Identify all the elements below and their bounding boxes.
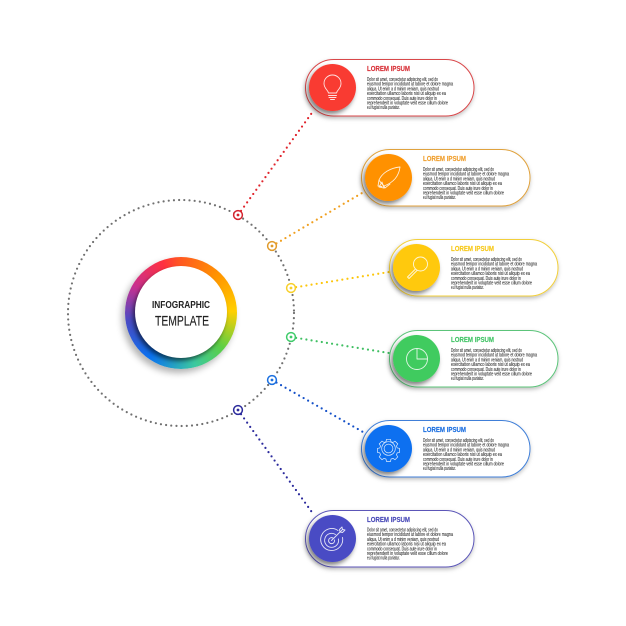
heading: LOREM IPSUM	[367, 515, 410, 524]
body text: eu fugiat nulla pariatur.	[423, 466, 456, 472]
body text: aliqua. Ut enim a d minim veniam, quis nostrud	[367, 537, 439, 543]
icon: magnifier	[408, 257, 428, 278]
panel: yellow magnifier item	[390, 240, 558, 296]
body text: Dolor sit amet, consectetur adipiscing elit, sed do	[451, 348, 522, 354]
icon: target	[321, 527, 345, 551]
panel: green pie chart item	[390, 330, 558, 387]
body text: eiusmod tempor incididunt ut labore et dolore magna	[451, 262, 537, 268]
body text: eu fugiat nulla pariatur.	[451, 285, 484, 291]
body text: exercitation ullamco laboris nisi ut aliquip ex ea	[367, 542, 446, 548]
body text: aliqua. Ut enim a d minim veniam, quis nostrud	[423, 447, 495, 453]
node: blue	[268, 376, 276, 384]
icon: gear	[377, 439, 400, 462]
title text	[152, 299, 210, 328]
body text: commodo consequat. Duis aute irure dolor in	[367, 546, 437, 552]
connector: blue	[272, 380, 363, 432]
body text	[423, 438, 509, 472]
body text: eiusmod tempor incididunt ut labore et dolore magna	[367, 82, 453, 88]
body text: commodo consequat. Duis aute irure dolor in	[423, 186, 493, 192]
connector: red	[238, 110, 314, 215]
body text: eiusmod tempor incididunt ut labore et dolore magna	[423, 172, 509, 178]
panel: red bulb item	[306, 60, 474, 116]
dotted orbit circle	[68, 200, 294, 426]
connector: orange	[272, 193, 362, 246]
icon: rocket	[378, 167, 400, 188]
body text: eu fugiat nulla pariatur.	[423, 195, 456, 201]
body text: reprehenderit in voluptate velit esse cillum dolore	[367, 551, 448, 557]
body text: reprehenderit in voluptate velit esse cillum dolore	[451, 280, 532, 286]
body text: Dolor sit amet, consectetur adipiscing elit, sed do	[367, 528, 438, 534]
node: red	[234, 211, 242, 219]
body text: eiusmod tempor incididunt ut labore et dolore magna	[367, 532, 453, 538]
icon: pie chart	[406, 348, 428, 370]
body text: commodo consequat. Duis aute irure dolor in	[451, 276, 521, 282]
heading: LOREM IPSUM	[367, 64, 410, 73]
title text: TEMPLATE	[155, 312, 209, 328]
heading: LOREM IPSUM	[423, 425, 466, 434]
body text: aliqua. Ut enim a d minim veniam, quis nostrud	[451, 357, 523, 363]
body text: eiusmod tempor incididunt ut labore et dolore magna	[451, 353, 537, 359]
body text: Dolor sit amet, consectetur adipiscing elit, sed do	[423, 167, 494, 173]
connector: green	[291, 337, 389, 353]
panel: purple target item	[306, 510, 474, 567]
body text: reprehenderit in voluptate velit esse cillum dolore	[423, 462, 504, 468]
body text	[423, 167, 509, 201]
panel: orange rocket item	[362, 150, 530, 206]
body text: eu fugiat nulla pariatur.	[451, 376, 484, 382]
heading: LOREM IPSUM	[451, 244, 494, 253]
body text: Dolor sit amet, consectetur adipiscing elit, sed do	[451, 257, 522, 263]
body text	[367, 528, 453, 562]
body text: reprehenderit in voluptate velit esse cillum dolore	[423, 190, 504, 196]
body text: eiusmod tempor incididunt ut labore et dolore magna	[423, 443, 509, 449]
heading: LOREM IPSUM	[451, 335, 494, 344]
body text: exercitation ullamco laboris nisi ut aliquip ex ea	[451, 271, 530, 277]
body text: reprehenderit in voluptate velit esse cillum dolore	[451, 372, 532, 378]
body text: eu fugiat nulla pariatur.	[367, 105, 400, 111]
inner white disc	[135, 266, 227, 358]
body text: exercitation ullamco laboris nisi ut aliquip ex ea	[451, 362, 530, 368]
body text: aliqua. Ut enim a d minim veniam, quis nostrud	[451, 266, 523, 272]
node: purple	[234, 406, 242, 414]
body text: reprehenderit in voluptate velit esse cillum dolore	[367, 100, 448, 106]
body text: commodo consequat. Duis aute irure dolor in	[367, 96, 437, 102]
node: orange	[268, 242, 276, 250]
body text: eu fugiat nulla pariatur.	[367, 556, 400, 562]
central rainbow ring with title	[125, 257, 237, 369]
body text: Dolor sit amet, consectetur adipiscing elit, sed do	[423, 438, 494, 444]
title text: INFOGRAPHIC	[152, 299, 210, 311]
body text: exercitation ullamco laboris nisi ut aliquip ex ea	[423, 452, 502, 458]
body text: aliqua. Ut enim a d minim veniam, quis nostrud	[423, 176, 495, 182]
body text	[367, 77, 453, 111]
body text: exercitation ullamco laboris nisi ut aliquip ex ea	[367, 91, 446, 97]
panel: blue gear item	[362, 420, 530, 477]
icon: light bulb	[324, 75, 341, 100]
body text	[451, 348, 537, 382]
body text: commodo consequat. Duis aute irure dolor in	[451, 367, 521, 373]
body text: exercitation ullamco laboris nisi ut aliquip ex ea	[423, 181, 502, 187]
heading: LOREM IPSUM	[423, 154, 466, 163]
node: yellow	[287, 284, 295, 292]
node: green	[287, 333, 295, 341]
body text: commodo consequat. Duis aute irure dolor in	[423, 457, 493, 463]
body text: Dolor sit amet, consectetur adipiscing elit, sed do	[367, 77, 438, 83]
body text: aliqua. Ut enim a d minim veniam, quis nostrud	[367, 86, 439, 92]
connector: purple	[238, 410, 314, 515]
connector: yellow	[291, 272, 389, 288]
body text	[451, 257, 537, 291]
